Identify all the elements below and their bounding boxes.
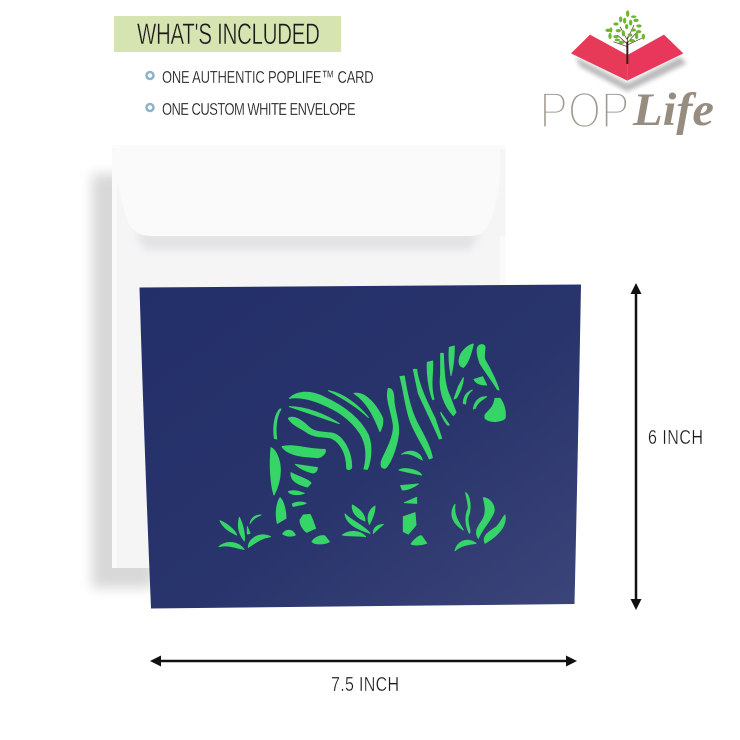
list: included items: ONE AUTHENTIC POPLIFE™ CARD [162,68,374,88]
logo: PopLife [540,10,714,138]
heading: what's included: WHAT'S INCLUDED [137,18,320,51]
logo text: POP: POP [540,82,630,138]
envelope flap [113,149,500,236]
zebra and plants cutout [219,344,505,551]
zebra neck, head and front legs [381,344,505,545]
icon: open book with tree [571,10,687,92]
arrow: width dimension [150,656,577,666]
list: included items [146,68,374,120]
label: 6 inch: 6 INCH [648,426,703,448]
card: navy with zebra cutout [140,284,581,608]
label: 7.5 inch: 7.5 INCH [331,673,399,695]
logo text: Life: Life [632,84,714,136]
plant: left [219,515,271,549]
plant: middle [342,505,383,537]
list: included items: ONE CUSTOM WHITE ENVELOPE [162,100,356,120]
envelope shadow [92,174,154,588]
envelope [92,145,506,588]
zebra hindquarters [270,391,383,544]
plant: right [452,493,505,551]
arrow: height dimension [630,283,642,610]
